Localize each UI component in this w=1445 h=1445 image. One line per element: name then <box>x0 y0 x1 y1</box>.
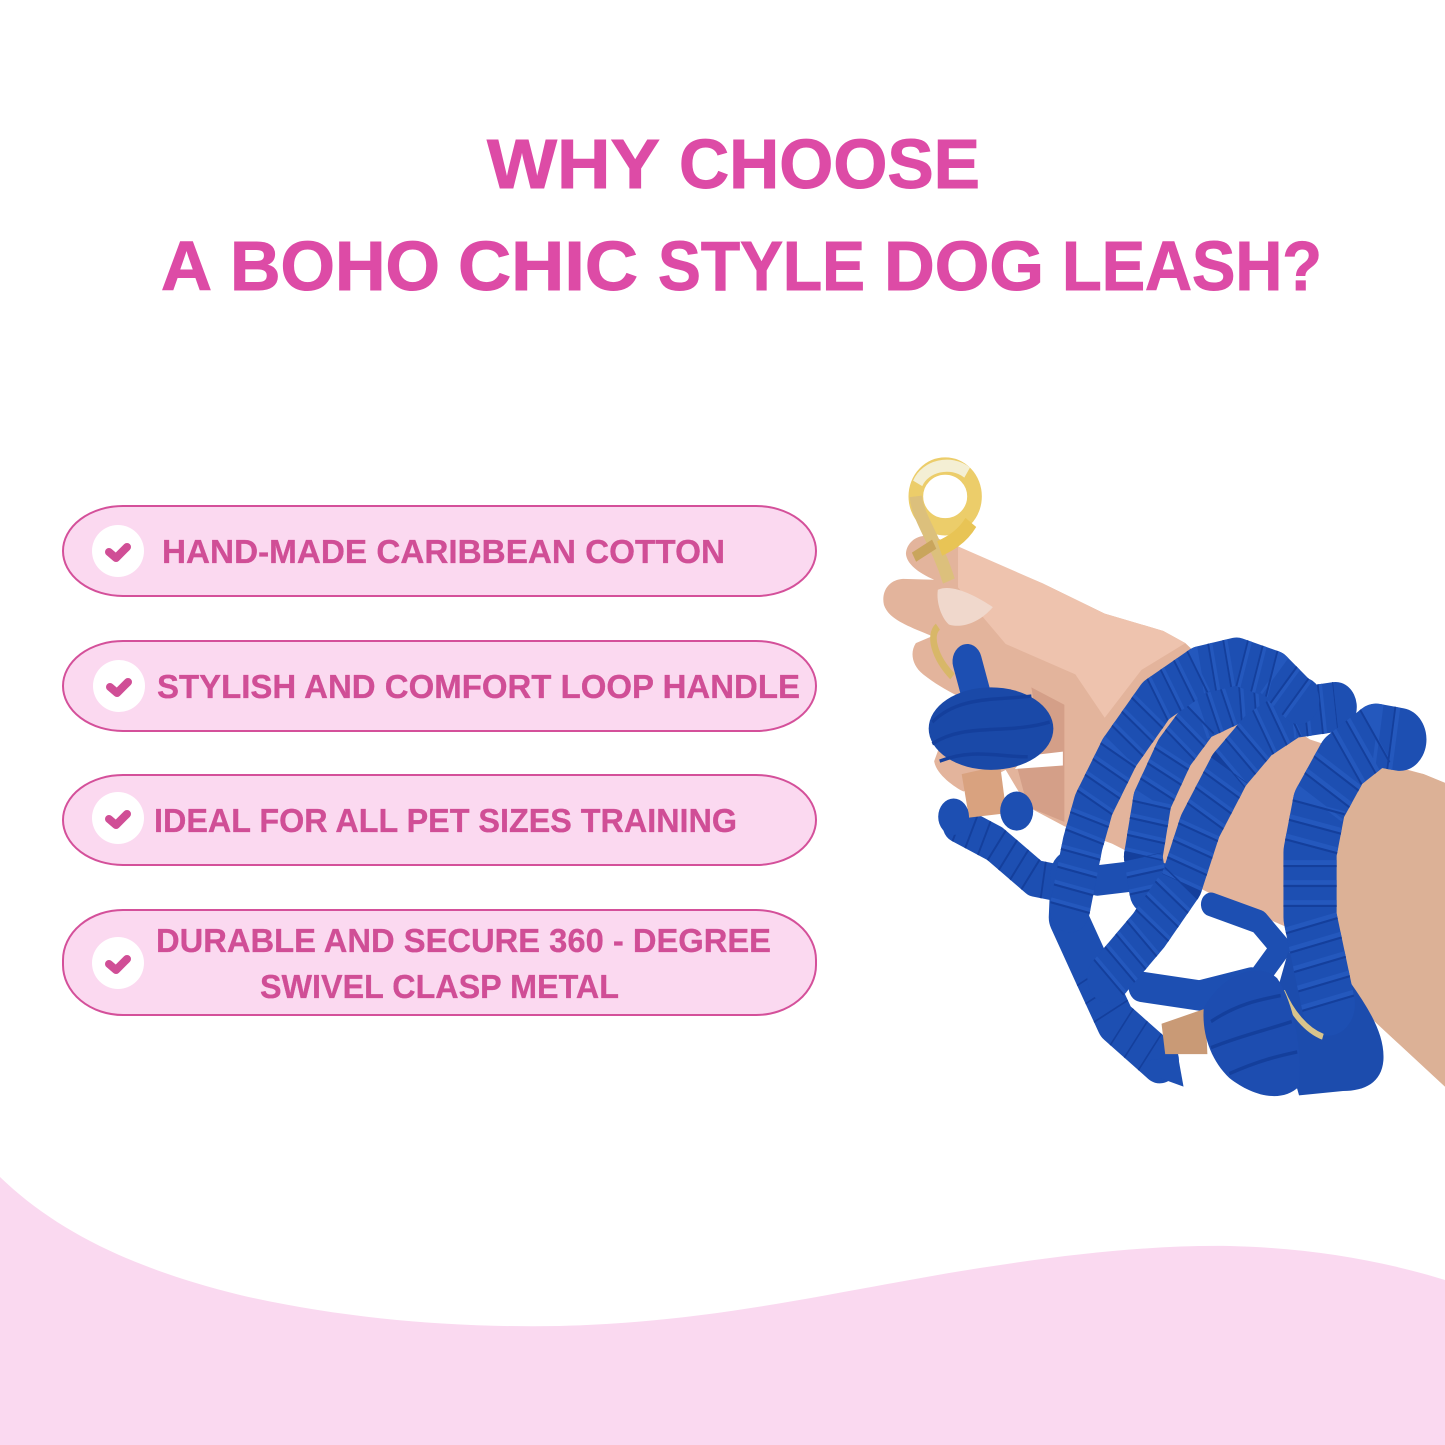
hand and arm <box>883 536 1445 1087</box>
background wave <box>0 1177 1445 1445</box>
title <box>161 125 1322 305</box>
rope knot handle <box>929 661 1053 835</box>
panel: benefit pill 2 <box>63 641 816 731</box>
copper wrap 2 <box>1162 1009 1207 1054</box>
benefit text 2: STYLISH AND COMFORT LOOP HANDLE <box>157 668 800 705</box>
title: LEASH? <box>1062 227 1322 305</box>
icon: check badge 3 <box>92 792 144 844</box>
copper wrap 1 <box>962 766 1006 818</box>
benefit text 4: SWIVEL CLASP METAL <box>260 968 619 1005</box>
benefit text 1: HAND-MADE CARIBBEAN COTTON <box>162 533 725 570</box>
benefit text 4 <box>156 922 771 1005</box>
title: DOG <box>884 227 1044 305</box>
title: A <box>161 227 212 305</box>
brass ring <box>1283 991 1323 1037</box>
icon: check badge 2 <box>93 660 145 712</box>
benefit text 3: IDEAL FOR ALL PET SIZES TRAINING <box>154 802 737 839</box>
benefit text 4: DURABLE AND SECURE 360 - DEGREE <box>156 922 771 959</box>
panel: benefit pill 4 <box>63 910 816 1015</box>
title: WHY <box>487 125 660 203</box>
panel: benefit pill 1 <box>63 506 816 596</box>
title: CHIC <box>458 227 638 305</box>
blue rope strands <box>958 661 1400 1095</box>
title: BOHO <box>230 227 440 305</box>
title: STYLE <box>658 227 865 305</box>
icon: check badge 1 <box>92 525 144 577</box>
icon: check badge 4 <box>92 937 144 989</box>
rope knot lower <box>1147 971 1300 1096</box>
title: CHOOSE <box>679 125 980 203</box>
product photo: hand holding blue rope leash <box>883 466 1445 1096</box>
brass snap clasp <box>914 466 975 677</box>
panel: benefit pill 3 <box>63 775 816 865</box>
